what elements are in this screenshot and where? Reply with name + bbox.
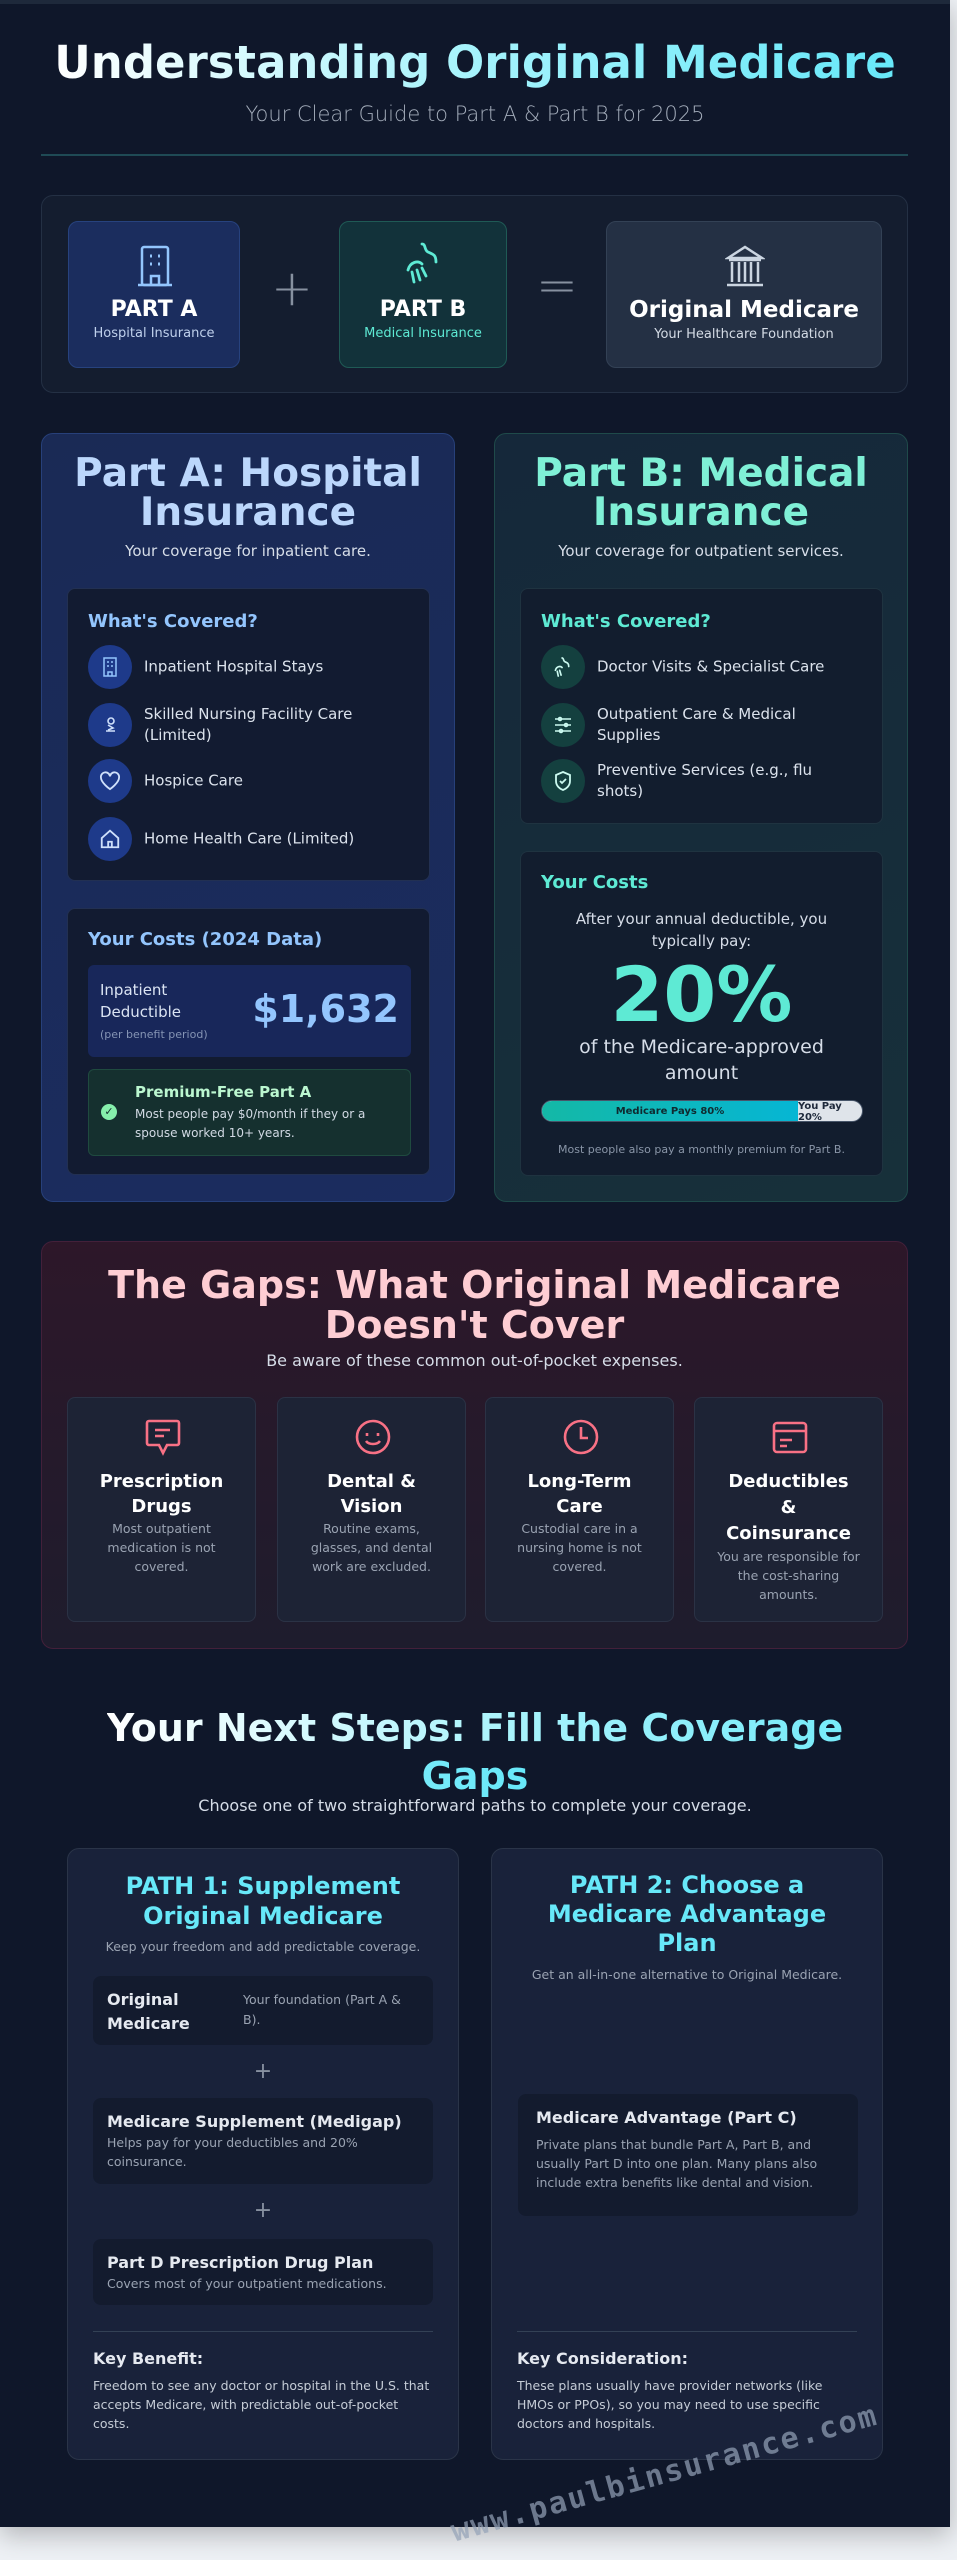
- premium-free callout: Most people pay $0/month if they or a: [135, 1107, 365, 1121]
- item: inpatient: [88, 645, 323, 689]
- deductible callout: Inpatient: [100, 981, 167, 999]
- box: Part B: Medical Insurance: [364, 326, 482, 341]
- item: nursing: [88, 703, 352, 747]
- panel: path 1: Original Medicare: [143, 1902, 383, 1930]
- heading: Part A: [74, 451, 422, 535]
- panel: gaps: [41, 1241, 908, 1649]
- box: Part B: [339, 221, 507, 368]
- plus sign: +: [271, 259, 313, 317]
- key consideration: [516, 2349, 822, 2431]
- heading: next steps: Your Next Steps: Fill the Coverage: [107, 1706, 843, 1750]
- panel: path 1: PATH 1: Supplement: [126, 1872, 400, 1900]
- heading: gaps: [108, 1263, 841, 1347]
- bar: 80/20 split: You Pay: [798, 1101, 842, 1112]
- card: deductibles: Deductibles: [728, 1471, 849, 1492]
- box: Medicare Advantage: Private plans that bundle Part A, Part B, and usually Part D into one plan. Many plans also include extra benefits like dental and vision.: [536, 2137, 817, 2190]
- key benefit: [93, 2349, 429, 2431]
- box: costs B: [520, 851, 883, 1176]
- heading: Part A: Part A: Hospital: [74, 451, 422, 496]
- box: what's covered B: [520, 588, 883, 824]
- key benefit: Key Benefit:: [93, 2349, 203, 2368]
- panel: path 2: Medicare Advantage: [548, 1900, 826, 1928]
- item: doctor visits: Doctor Visits & Specialist Care: [597, 658, 824, 676]
- icon: hospital building: [138, 246, 172, 286]
- item: inpatient: Inpatient Hospital Stays: [144, 658, 323, 676]
- card: prescription drugs: Prescription: [100, 1471, 223, 1492]
- card: long-term care: Care: [556, 1496, 603, 1517]
- item: home health: [88, 817, 354, 861]
- panel: path 1: Keep your freedom and add predictable coverage.: [106, 1939, 420, 1954]
- box: costs B: Most people also pay a monthly premium for Part B.: [558, 1143, 845, 1156]
- box: Part B: PART B: [380, 297, 466, 322]
- card: dental & vision: Dental &: [327, 1471, 416, 1492]
- panel: gaps: Be aware of these common out-of-pocket expenses.: [266, 1351, 683, 1370]
- big stat: 20%: 20%: [611, 950, 792, 1039]
- card: dental & vision: [277, 1397, 466, 1622]
- box: costs B: After your annual deductible, you: [576, 910, 827, 928]
- item: outpatient: Outpatient Care & Medical: [597, 705, 796, 723]
- panel: path 1: +: [254, 2198, 272, 2223]
- premium-free callout: ✓: [104, 1105, 114, 1118]
- card: deductibles: Coinsurance: [726, 1523, 851, 1544]
- premium-free callout: [88, 1069, 411, 1156]
- box: what's covered B: What's Covered?: [541, 611, 711, 632]
- box: Original Medicare: [606, 221, 882, 368]
- card: long-term care: Custodial care in a nursing home is not covered.: [517, 1521, 642, 1574]
- key consideration: Key Consideration:: [517, 2349, 688, 2368]
- premium-free callout: spouse worked 10+ years.: [135, 1126, 295, 1140]
- box: Part A: Hospital Insurance: [94, 326, 214, 341]
- subtitle: Your coverage for inpatient care.: [125, 542, 371, 560]
- box: costs A: [67, 908, 430, 1175]
- step: Medigap: Medicare Supplement (Medigap): [107, 2112, 402, 2131]
- equals sign: =: [536, 256, 578, 314]
- item: hospice: Hospice Care: [144, 772, 243, 790]
- item: preventive: shots): [597, 782, 643, 800]
- icon: government building: [725, 246, 765, 286]
- box: costs B: amount: [665, 1062, 738, 1084]
- panel: Part A: [41, 433, 455, 1202]
- heading: Part B: [534, 451, 868, 535]
- watermark: www.paulbinsurance.com: [447, 2398, 882, 2549]
- panel: Part B: [494, 433, 908, 1202]
- heading: gaps: Doesn't Cover: [325, 1303, 624, 1347]
- step: Medigap: coinsurance.: [107, 2154, 187, 2169]
- step: Original Medicare: Medicare: [107, 2014, 190, 2033]
- deductible callout: (per benefit period): [100, 1028, 208, 1041]
- item: hospice: [88, 759, 243, 803]
- card: deductibles: &: [781, 1497, 796, 1518]
- step: Original Medicare: Your foundation (Part A &: [243, 1992, 401, 2007]
- step: Medigap: [93, 2098, 433, 2184]
- panel: path 2: Plan: [657, 1929, 717, 1957]
- heading: Part B: Part B: Medical: [534, 451, 868, 496]
- card: deductibles: You are responsible for the cost-sharing amounts.: [717, 1549, 860, 1602]
- subtitle: next steps: Choose one of two straightforward paths to complete your coverage.: [198, 1796, 752, 1815]
- bar: 80/20 split: Medicare Pays 80%: [616, 1106, 724, 1117]
- premium-free callout: Premium-Free Part A: [135, 1083, 311, 1101]
- step: Part D: Covers most of your outpatient medications.: [107, 2276, 387, 2291]
- step: Original Medicare: B).: [243, 2012, 260, 2027]
- card: long-term care: [485, 1397, 674, 1622]
- card: deductibles: [694, 1397, 883, 1622]
- card: prescription drugs: Most outpatient medication is not covered.: [107, 1521, 216, 1574]
- deductible callout: Deductible: [100, 1003, 181, 1021]
- panel: path 2: PATH 2: Choose a: [570, 1871, 804, 1899]
- box: Medicare Advantage: [518, 2094, 858, 2216]
- panel: path 2: Get an all-in-one alternative to Original Medicare.: [532, 1967, 842, 1982]
- panel: path 2: [491, 1848, 883, 2460]
- heading: Part B: Insurance: [593, 490, 809, 535]
- box: Part A: PART A: [111, 297, 197, 322]
- box: Original Medicare: Your Healthcare Foundation: [654, 327, 834, 342]
- box: costs B: Your Costs: [541, 872, 648, 893]
- item: doctor visits: [541, 645, 824, 689]
- box: Part A: [68, 221, 240, 368]
- box: Original Medicare: Original Medicare: [629, 297, 859, 323]
- step: Part D: Part D Prescription Drug Plan: [107, 2253, 373, 2272]
- heading: next steps: Gaps: [422, 1754, 528, 1798]
- panel: path 1: [67, 1848, 459, 2460]
- item: preventive: [541, 759, 812, 803]
- item: nursing: Skilled Nursing Facility Care: [144, 705, 352, 723]
- title: Understanding Original Medicare: [54, 36, 896, 89]
- deductible callout: $1,632: [252, 987, 399, 1031]
- step: Medigap: Helps pay for your deductibles and 20%: [107, 2135, 358, 2150]
- item: home health: Home Health Care (Limited): [144, 830, 354, 848]
- box: Medicare Advantage: Medicare Advantage (Part C): [536, 2108, 797, 2127]
- heading: next steps: [107, 1706, 843, 1798]
- subtitle: Your coverage for outpatient services.: [558, 542, 844, 560]
- step: Original Medicare: Original: [107, 1990, 179, 2009]
- bar: 80/20 split: [541, 1100, 863, 1122]
- step: Original Medicare: [93, 1976, 433, 2045]
- card: long-term care: Long-Term: [527, 1471, 632, 1492]
- panel: formula: [41, 195, 908, 393]
- deductible callout: [88, 965, 411, 1057]
- key benefit: Freedom to see any doctor or hospital in the U.S. that accepts Medicare, with predictable out-of-pocket costs.: [93, 2378, 429, 2431]
- box: costs A: Your Costs (2024 Data): [88, 929, 322, 950]
- box: costs B: typically pay:: [652, 932, 751, 950]
- card: dental & vision: Vision: [341, 1496, 402, 1517]
- panel: path 1: +: [254, 2059, 272, 2084]
- card: prescription drugs: [67, 1397, 256, 1622]
- icon: stethoscope: [406, 242, 438, 284]
- heading: Part A: Insurance: [140, 490, 356, 535]
- card: prescription drugs: Drugs: [131, 1496, 192, 1517]
- item: preventive: Preventive Services (e.g., flu: [597, 761, 812, 779]
- box: costs B: of the Medicare-approved: [579, 1036, 824, 1058]
- item: nursing: (Limited): [144, 726, 212, 744]
- item: outpatient: [541, 703, 796, 747]
- heading: gaps: The Gaps: What Original Medicare: [108, 1263, 841, 1307]
- box: what's covered A: [67, 588, 430, 881]
- key consideration: These plans usually have provider networks (like HMOs or PPOs), so you may need to use specific doctors and hospitals.: [517, 2378, 822, 2431]
- item: outpatient: Supplies: [597, 726, 660, 744]
- card: dental & vision: Routine exams, glasses, and dental work are excluded.: [311, 1521, 432, 1574]
- box: what's covered A: What's Covered?: [88, 611, 258, 632]
- subtitle: Your Clear Guide to Part A & Part B for 2025: [246, 102, 704, 126]
- step: Part D: [93, 2239, 433, 2305]
